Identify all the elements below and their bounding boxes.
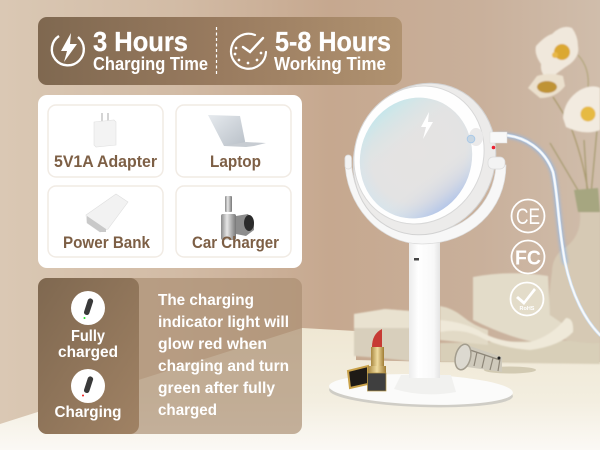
explanation text: [158, 292, 289, 419]
ring gap by touch button: [469, 128, 483, 146]
explanation text: The charging: [158, 292, 254, 309]
icon: RoHS certification: [510, 282, 544, 316]
light ring: [331, 65, 507, 245]
icon: RoHS certification: RoHS: [520, 306, 535, 312]
icon: laptop: [208, 115, 266, 147]
icon: adapter: [94, 113, 116, 147]
card: power bank: [48, 186, 163, 257]
explanation text: green after fully: [158, 380, 275, 397]
icon: red indicator: [71, 369, 105, 403]
mirror product: [329, 60, 520, 410]
explanation text: indicator light will: [158, 314, 289, 331]
icon: car charger: [221, 196, 254, 240]
label: charging: Charging: [54, 404, 122, 421]
label: fully charged: Fully: [71, 328, 105, 345]
lipstick: [348, 329, 386, 391]
icon: CE certification: CE: [516, 204, 540, 229]
mirror face: [343, 82, 489, 234]
base tray: [329, 371, 513, 410]
background props: box, cylinder, wave tray, vase: [354, 212, 600, 364]
touch button: [467, 135, 475, 143]
USB plug: [490, 132, 507, 143]
explanation text: charged: [158, 402, 217, 419]
icon: power bank: [86, 194, 128, 232]
label: Laptop: [210, 152, 261, 171]
icon: lightning charging: [52, 33, 84, 65]
stem: [409, 238, 440, 378]
heading: 3 hours: 3 Hours: [93, 26, 188, 57]
indicator states column: [38, 278, 139, 434]
label: charged: charged: [58, 344, 118, 361]
card: 5V1A adapter: [48, 105, 163, 177]
explanation text: charging and turn: [158, 358, 289, 375]
panel: charging and working time: [38, 17, 402, 85]
table surface: [0, 328, 600, 450]
label: working time: Working Time: [274, 54, 386, 74]
mirror back housing: [329, 60, 520, 258]
watch: [453, 343, 536, 374]
icon: CE certification: [512, 200, 544, 232]
label: 5V1A Adapter: [54, 152, 157, 171]
icon: FCC certification: [512, 240, 544, 274]
panel: compatible power sources: [38, 95, 302, 268]
label: Power Bank: [63, 233, 150, 252]
icon: clock with check: [231, 34, 266, 69]
icon: green indicator: [71, 291, 105, 325]
heading: 5-8 hours: 5-8 Hours: [275, 26, 391, 57]
label: Car Charger: [192, 233, 279, 252]
mirror face blue dot glow: [343, 82, 489, 234]
icon: FCC certification: FC: [515, 248, 541, 270]
panel: charging indicator explanation: [38, 278, 302, 434]
explanation text: glow red when: [158, 336, 267, 353]
label: charging time: Charging Time: [93, 54, 208, 74]
icon: lightning on mirror: [421, 112, 433, 139]
red indicator dot: [492, 146, 495, 149]
flowers: [528, 27, 600, 212]
card: laptop: [176, 105, 291, 177]
cable: [500, 135, 600, 335]
yoke: [345, 158, 506, 244]
card: car charger: [176, 186, 291, 257]
yoke pivots: [345, 155, 505, 169]
